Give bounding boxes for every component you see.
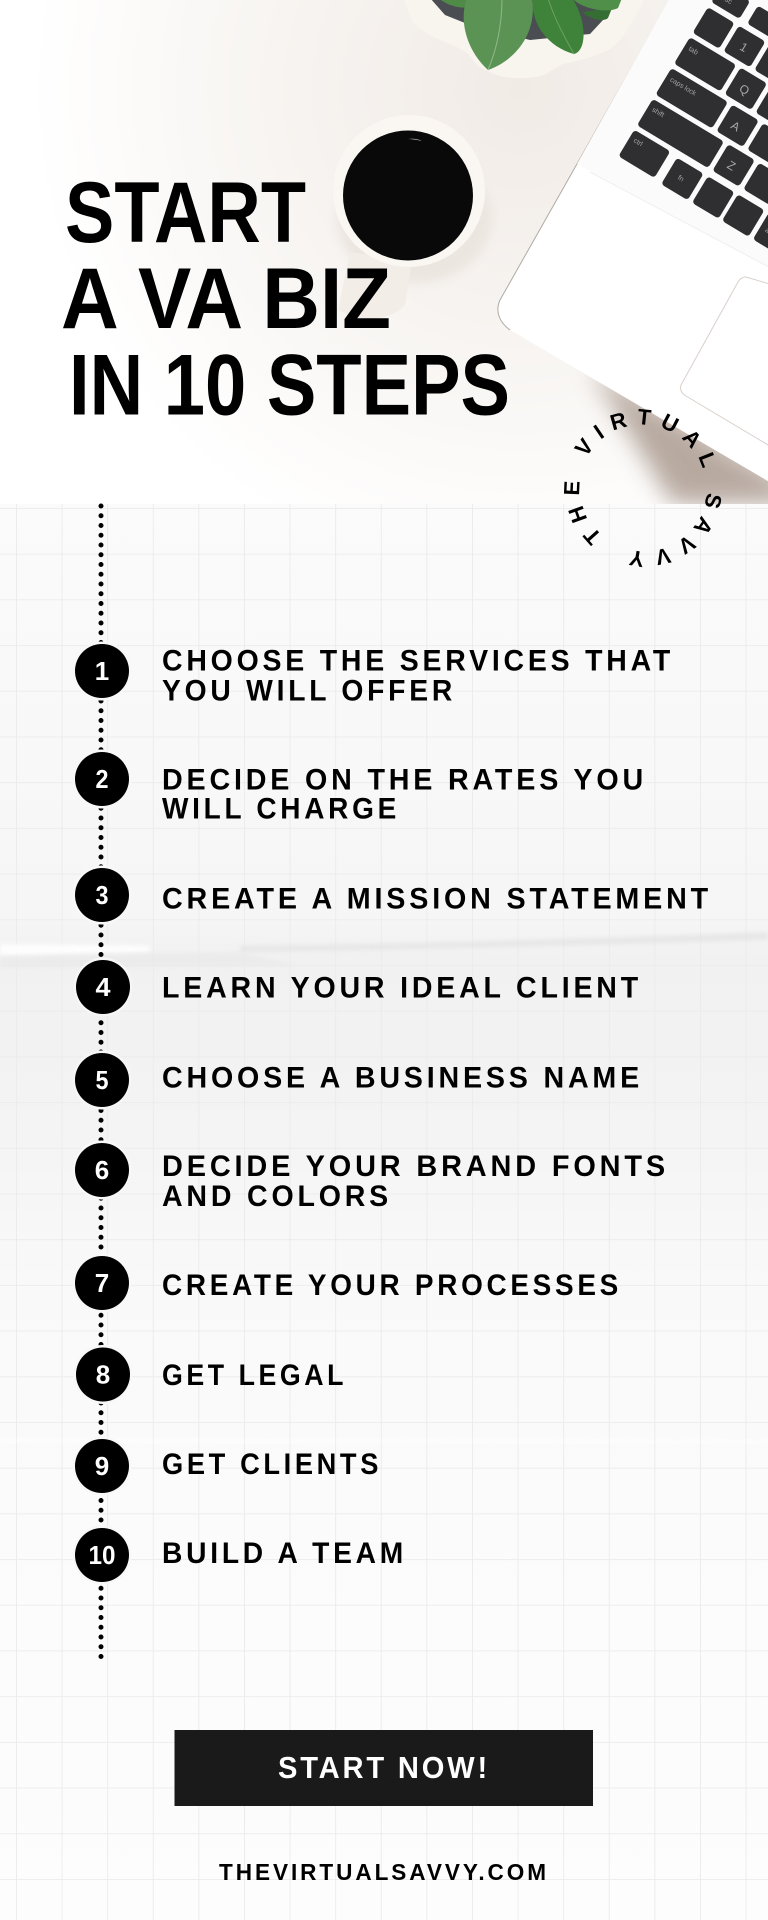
title: A VA BIZ	[61, 251, 391, 347]
step 10	[72, 1526, 407, 1584]
step 9	[72, 1436, 382, 1496]
keyboard keys: caps lock	[669, 77, 698, 98]
step 4: 4	[96, 972, 111, 1002]
step 6: 6	[95, 1155, 109, 1185]
title: IN 10 STEPS	[69, 338, 510, 434]
step 1: YOU WILL OFFER	[162, 674, 456, 708]
step 4	[74, 958, 642, 1016]
step 5: CHOOSE A BUSINESS NAME	[162, 1062, 643, 1094]
panel: graph paper background	[0, 504, 768, 1920]
step 3	[72, 866, 712, 924]
button: start now	[174, 1730, 593, 1806]
keyboard deck	[577, 0, 670, 164]
step 2: 2	[96, 764, 108, 794]
step 1	[72, 642, 674, 708]
step 8	[74, 1345, 347, 1404]
footer website: THEVIRTUALSAVVY.COM	[219, 1859, 549, 1885]
keyboard keys: shift	[650, 107, 665, 119]
steps list	[72, 642, 712, 1584]
step 2: DECIDE ON THE RATES YOU	[162, 764, 647, 796]
keyboard keys: tab	[687, 46, 699, 57]
keyboard keys: A	[729, 118, 743, 134]
step 2	[72, 750, 647, 826]
keyboard keys: 1	[737, 40, 751, 55]
keyboard keys: Z	[725, 158, 738, 174]
keyboard keys: fn	[676, 174, 685, 184]
button: start now: START NOW!	[278, 1750, 490, 1785]
icon: coffee cup	[333, 115, 492, 318]
step 1: 1	[95, 656, 109, 686]
panel: header desk photo	[173, 0, 768, 504]
step 8: GET LEGAL	[162, 1359, 347, 1392]
step 6: AND COLORS	[162, 1180, 392, 1213]
title	[61, 165, 510, 434]
step 7: 7	[95, 1268, 109, 1298]
step 3: 3	[96, 880, 108, 910]
step 7	[72, 1254, 622, 1312]
step 10: BUILD A TEAM	[162, 1537, 407, 1570]
circular logo text: THE VIRTUAL SAVVY	[564, 408, 722, 568]
step 5	[72, 1050, 643, 1110]
step 5: 5	[96, 1065, 108, 1095]
step 1: CHOOSE THE SERVICES THAT	[162, 644, 674, 678]
trackpad	[681, 277, 768, 458]
step 6	[72, 1140, 669, 1213]
step 9: GET CLIENTS	[162, 1448, 382, 1481]
keyboard keys: Q	[737, 81, 752, 98]
step 6: DECIDE YOUR BRAND FONTS	[162, 1150, 669, 1183]
icon: laptop	[498, 0, 768, 504]
title: START	[65, 165, 306, 261]
step 2: WILL CHARGE	[162, 792, 400, 826]
keyboard keys	[617, 0, 768, 256]
keyboard keys: ctrl	[632, 137, 644, 148]
icon: plant in white dish	[432, 0, 622, 78]
step 8: 8	[96, 1360, 110, 1390]
step 10: 10	[88, 1540, 116, 1570]
step 3: CREATE A MISSION STATEMENT	[162, 882, 712, 916]
step 9: 9	[95, 1451, 109, 1481]
step 7: CREATE YOUR PROCESSES	[162, 1269, 622, 1302]
dotted timeline	[98, 506, 104, 1659]
step 4: LEARN YOUR IDEAL CLIENT	[162, 972, 642, 1004]
